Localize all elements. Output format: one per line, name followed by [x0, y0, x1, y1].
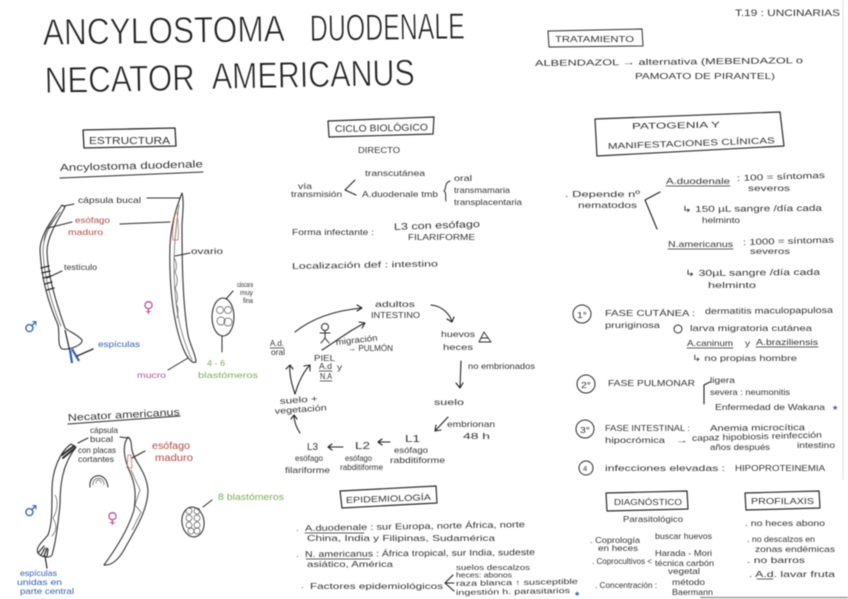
icon: mouth capsule detail: [90, 476, 108, 487]
phase 1: fase cutanea: y: [745, 338, 751, 348]
phase 1: fase cutanea: dermatitis maculopapulosa: [705, 305, 833, 316]
panel: patogenia: [565, 112, 838, 475]
phase 3: fase intestinal: intestino: [797, 440, 835, 450]
phase 1: fase cutanea: A.caninum: [687, 338, 733, 348]
list: metodos diagnostico: Baermann: [672, 587, 713, 597]
node: suelo y vegetacion: suelo +: [279, 393, 318, 406]
diagram: ancylostoma egg: cáscara: [237, 280, 254, 289]
list: metodos diagnostico: vegetal: [668, 566, 700, 576]
phase 2: fase pulmonar: FASE PULMONAR: [608, 378, 695, 388]
labels: necator structures: unidas en: [17, 577, 62, 587]
list: metodos diagnostico: técnica carbón: [655, 558, 714, 568]
icon: male symbol necator: ♂: [24, 502, 37, 520]
panel: tratamiento: [535, 29, 803, 81]
phase 3: fase intestinal: [576, 420, 835, 452]
subheading: necator americanus: Necator americanus: [68, 407, 180, 424]
labels: necator structures: cortantes: [78, 454, 114, 464]
node: piel: A.d: [319, 361, 332, 371]
label: migracion pulmon: [335, 333, 393, 353]
label: migracion pulmon: migración: [335, 333, 378, 347]
label: embrionan 48 h: 48 h: [463, 431, 490, 441]
diagram: ancylostoma egg: fina: [243, 296, 254, 305]
text: a. duodenale sintomas: helminto: [702, 215, 740, 225]
text: n. americanus sintomas: [668, 235, 834, 290]
heading: profilaxis: PROFILAXIS: [751, 496, 814, 506]
text: via transmision: vía: [298, 181, 312, 191]
text: tratamiento body: [535, 55, 803, 81]
node: l2: esófago: [345, 453, 372, 463]
phase 3: fase intestinal: años después: [710, 442, 770, 452]
heading: patogenia: PATOGENIA Y: [632, 119, 721, 131]
text: factores epidemiologicos: raza blanca ↑ susceptible: [456, 577, 578, 588]
phase 2: fase pulmonar: Enfermedad de Wakana: [715, 402, 825, 412]
panel: profilaxis: [745, 491, 835, 579]
phase 3: fase intestinal: 3°: [580, 425, 590, 435]
text: n. americanus distribution: asiático, América: [307, 559, 393, 569]
label: embrionan 48 h: [447, 419, 495, 441]
list: profilaxis: . no descalzos en: [747, 534, 815, 544]
title: NECATOR: [44, 57, 195, 101]
heading: tratamiento: TRATAMIENTO: [555, 34, 635, 44]
node: suelo: suelo: [434, 397, 464, 407]
diagram: ancylostoma egg: muy: [240, 288, 253, 297]
node: l3: [285, 441, 330, 475]
labels: necator structures: con placas: [78, 445, 116, 455]
text: depende nematodos: nematodos: [578, 200, 637, 210]
phase 3: fase intestinal: Anemia microcítica: [710, 422, 805, 433]
phase 1: fase cutanea: larva migratoria cutánea: [690, 323, 812, 333]
node: l2: [340, 440, 383, 472]
node: huevos heces: [441, 329, 491, 352]
icon: female symbol: ♀: [143, 298, 154, 316]
node: a.d. oral: [270, 338, 285, 357]
diagram: necator egg: [180, 492, 285, 538]
phase 1: fase cutanea: ↳ no propias hombre: [692, 353, 797, 363]
phase 1: fase cutanea: [573, 305, 833, 363]
list: profilaxis: . A.d. lavar fruta: [749, 569, 835, 579]
title: [42, 6, 465, 101]
node: adultos intestino: [371, 299, 420, 320]
phase 2: fase pulmonar: [577, 375, 838, 412]
subheading: ancylostoma duodenale: Ancylostoma duodenale: [60, 159, 204, 174]
text: n. americanus sintomas: helminto: [708, 280, 756, 290]
node: suelo y vegetacion: [274, 393, 327, 416]
node: l3: esófago: [295, 453, 323, 463]
phase 2: fase pulmonar: ligera: [710, 375, 735, 385]
text: localizacion definitiva: Localización def : intestino: [292, 258, 438, 271]
text: parasitologico: Parasitológico: [623, 514, 683, 524]
phase 2: fase pulmonar: severa : neumonitis: [710, 387, 790, 397]
node: l3: filariforme: [285, 465, 330, 475]
node: l1: rabditiforme: [390, 455, 445, 465]
text: forma infectante: FILARIFORME: [408, 232, 475, 242]
labels: ancylostoma structures: esófago: [75, 215, 110, 225]
phase 1: fase cutanea: FASE CUTÁNEA :: [605, 308, 695, 318]
text: n. americanus distribution: [296, 547, 535, 569]
diagram: male ancylostoma worm: [40, 205, 82, 363]
labels: necator structures: bucal: [90, 434, 113, 444]
node: l2: L2: [355, 440, 370, 452]
text: a. duodenale sintomas: [666, 170, 825, 225]
list: profilaxis: zonas endémicas: [755, 544, 835, 554]
panel: epidemiologia: [296, 486, 580, 598]
text: a. duodenale sintomas: severos: [748, 183, 790, 193]
text: factores epidemiologicos: suelos descalzos: [456, 563, 530, 572]
list: metodos diagnostico: [590, 531, 714, 597]
text: n. americanus sintomas: ↳ 30µL sangre /día cada: [685, 267, 820, 278]
phase 3: fase intestinal: hipocrómica: [605, 435, 665, 445]
labels: ancylostoma structures: espículas: [98, 339, 140, 349]
label: no embrionados: no embrionados: [468, 361, 535, 371]
text: via transmision: A.duodenale tmb: [362, 189, 438, 199]
icon: person: [320, 324, 330, 343]
diagram: ancylostoma egg: [198, 280, 258, 380]
heading: tratamiento: [548, 29, 643, 47]
labels: necator structures: parte central: [20, 586, 74, 596]
node: l1: esófago: [394, 445, 428, 455]
text: via transmision: transcutánea: [365, 168, 425, 178]
diagram: ancylostoma egg: blastómeros: [198, 370, 258, 380]
text: a. duodenale sintomas: A.duodenale: [666, 176, 730, 186]
text: a. duodenale distribution: China, India y Filipinas, Sudamérica: [307, 533, 495, 543]
text: forma infectante: Forma infectante :: [292, 227, 374, 237]
node: l1: L1: [405, 433, 420, 445]
phase 2: fase pulmonar: 2°: [581, 380, 591, 390]
phase 3: fase intestinal: capaz hipobiosis reinfección: [692, 430, 822, 443]
icon: male symbol: ♂: [24, 318, 37, 336]
node: l1: [390, 433, 445, 465]
heading: ciclo biologico: CICLO BIOLÓGICO: [335, 122, 428, 135]
text: via transmision: [291, 168, 522, 207]
phase 4: infecciones elevadas: infecciones elevadas :: [605, 463, 725, 473]
phase 1: fase cutanea: 1°: [577, 310, 587, 320]
phase 4: infecciones elevadas: 4: [583, 464, 587, 473]
text: a. duodenale sintomas: ↳ 150 µL sangre /día cada: [682, 203, 822, 214]
text: n. americanus sintomas: N.americanus: [668, 239, 733, 249]
heading: estructura: ESTRUCTURA: [89, 136, 170, 147]
text: forma infectante: [292, 219, 480, 242]
text: factores epidemiologicos: [301, 563, 580, 598]
text: n. americanus distribution: ·: [296, 551, 299, 561]
heading: diagnostico: DIAGNÓSTICO: [614, 497, 682, 507]
text: tratamiento body: PAMOATO DE PIRANTEL): [635, 71, 775, 81]
list: metodos diagnostico: . Coprocultivos <: [592, 556, 652, 566]
diagram: female ancylostoma worm: [170, 193, 196, 362]
heading: epidemiologia: EPIDEMIOLOGÍA: [346, 492, 431, 505]
heading: ciclo biologico: [328, 117, 434, 137]
text: a. duodenale distribution: [296, 519, 525, 543]
title: DUODENALE: [309, 6, 465, 49]
text: n. americanus distribution: N. americanus : África tropical, sur India, sudeste: [305, 547, 535, 559]
phase 3: fase intestinal: FASE INTESTINAL :: [605, 423, 690, 433]
label: migracion pulmon: → PULMÓN: [348, 343, 393, 353]
text: factores epidemiologicos: ingestión h. parasitarios: [456, 586, 570, 597]
text: forma infectante: L3 con esófago: [394, 219, 480, 233]
diagram: male necator worm: [37, 444, 76, 568]
node: a.d. oral: A.d.: [270, 338, 284, 348]
phase 1: fase cutanea: pruriginosa: [605, 320, 660, 330]
labels: ancylostoma structures: maduro: [68, 227, 103, 237]
labels: ancylostoma structures: testículo: [64, 262, 97, 272]
heading: epidemiologia: [340, 486, 437, 508]
node: adultos intestino: adultos: [375, 299, 415, 309]
labels: necator structures: espículas: [20, 568, 57, 578]
labels: necator structures: [17, 425, 193, 596]
text: a. duodenale sintomas: : 100 = síntomas: [737, 170, 825, 183]
labels: necator structures: esófago: [152, 441, 190, 452]
phase 3: fase intestinal: →: [676, 435, 688, 445]
phase 2: fase pulmonar: ★: [832, 404, 838, 412]
text: factores epidemiologicos: ·: [301, 582, 304, 592]
text: factores epidemiologicos: ★: [574, 590, 580, 598]
list: metodos diagnostico: buscar huevos: [655, 531, 712, 541]
heading: patogenia: [595, 112, 784, 156]
list: profilaxis: [745, 518, 835, 579]
text: factores epidemiologicos: heces: abonos: [456, 570, 512, 580]
title: ANCYLOSTOMA: [42, 8, 285, 53]
phase 1: fase cutanea: A.braziliensis: [756, 337, 818, 347]
panel: estructura: [17, 128, 285, 596]
labels: ancylostoma structures: mucro: [137, 370, 166, 380]
text: depende nematodos: . Depende nº: [565, 189, 640, 199]
node: suelo y vegetacion: vegetación: [274, 402, 327, 416]
diagram: female necator worm: [104, 437, 148, 565]
text: via transmision: transplacentaria: [454, 197, 522, 207]
node: l3: L3: [307, 441, 318, 453]
list: profilaxis: . no heces abono: [745, 518, 825, 528]
text: tratamiento body: ALBENDAZOL → alternativa (MEBENDAZOL o: [535, 55, 803, 68]
text: n. americanus sintomas: : 1000 = síntomas: [743, 235, 834, 247]
text: n. americanus sintomas: severos: [750, 246, 790, 256]
text: via transmision: transmisión: [291, 189, 342, 199]
text: via transmision: transmamaria: [454, 185, 510, 195]
subheading: ancylostoma duodenale: [60, 159, 204, 178]
phase 4: infecciones elevadas: [579, 461, 825, 475]
node: a.d. oral: oral: [271, 347, 285, 357]
labels: ancylostoma structures: [47, 195, 223, 380]
list: metodos diagnostico: . Concentración :: [595, 580, 657, 590]
node: l2: rabditiforme: [340, 462, 383, 472]
labels: ancylostoma structures: cápsula bucal: [78, 195, 141, 205]
list: metodos diagnostico: Harada - Mori: [655, 548, 712, 558]
list: metodos diagnostico: método: [672, 577, 705, 587]
icon: female symbol necator: ♀: [107, 509, 118, 527]
text: depende nematodos: [565, 189, 660, 229]
phase 4: infecciones elevadas: HIPOPROTEINEMIA: [735, 463, 825, 473]
diagram: necator egg: 8 blastómeros: [218, 492, 285, 502]
text: factores epidemiologicos: Factores epidemiológicos: [310, 581, 443, 591]
panel: ciclo biologico: [270, 117, 535, 475]
title: AMERICANUS: [211, 52, 415, 97]
node: adultos intestino: INTESTINO: [371, 310, 420, 320]
list: metodos diagnostico: . Coprología: [590, 535, 640, 545]
list: metodos diagnostico: en heces: [598, 543, 638, 553]
labels: ancylostoma structures: ovario: [191, 246, 223, 256]
label: embrionan 48 h: embrionan: [447, 419, 495, 429]
text: a. duodenale distribution: A.duodenale : sur Europa, norte África, norte: [305, 519, 525, 533]
topic tag: T.19 : UNCINARIAS: [735, 8, 840, 19]
labels: necator structures: cápsula: [90, 425, 118, 435]
diagram: ancylostoma egg: 4 - 6: [207, 358, 225, 368]
heading: patogenia: MANIFESTACIONES CLÍNICAS: [608, 135, 775, 151]
text: a. duodenale distribution: ·: [296, 525, 299, 535]
list: profilaxis: . no barros: [747, 555, 805, 565]
text: via transmision: oral: [454, 173, 472, 183]
panel: diagnostico: [590, 491, 714, 597]
node: piel: y: [337, 362, 343, 372]
labels: necator structures: maduro: [155, 453, 193, 464]
node: huevos heces: huevos: [441, 329, 475, 339]
text: directo: DIRECTO: [358, 145, 400, 155]
arrows: cycle: [286, 305, 463, 450]
diagram: life cycle: [270, 299, 535, 475]
node: huevos heces: heces: [443, 342, 473, 352]
node: piel: N.A: [320, 371, 332, 381]
node: piel: [314, 353, 343, 381]
node: piel: PIEL: [314, 353, 335, 363]
heading: estructura: [83, 128, 176, 148]
